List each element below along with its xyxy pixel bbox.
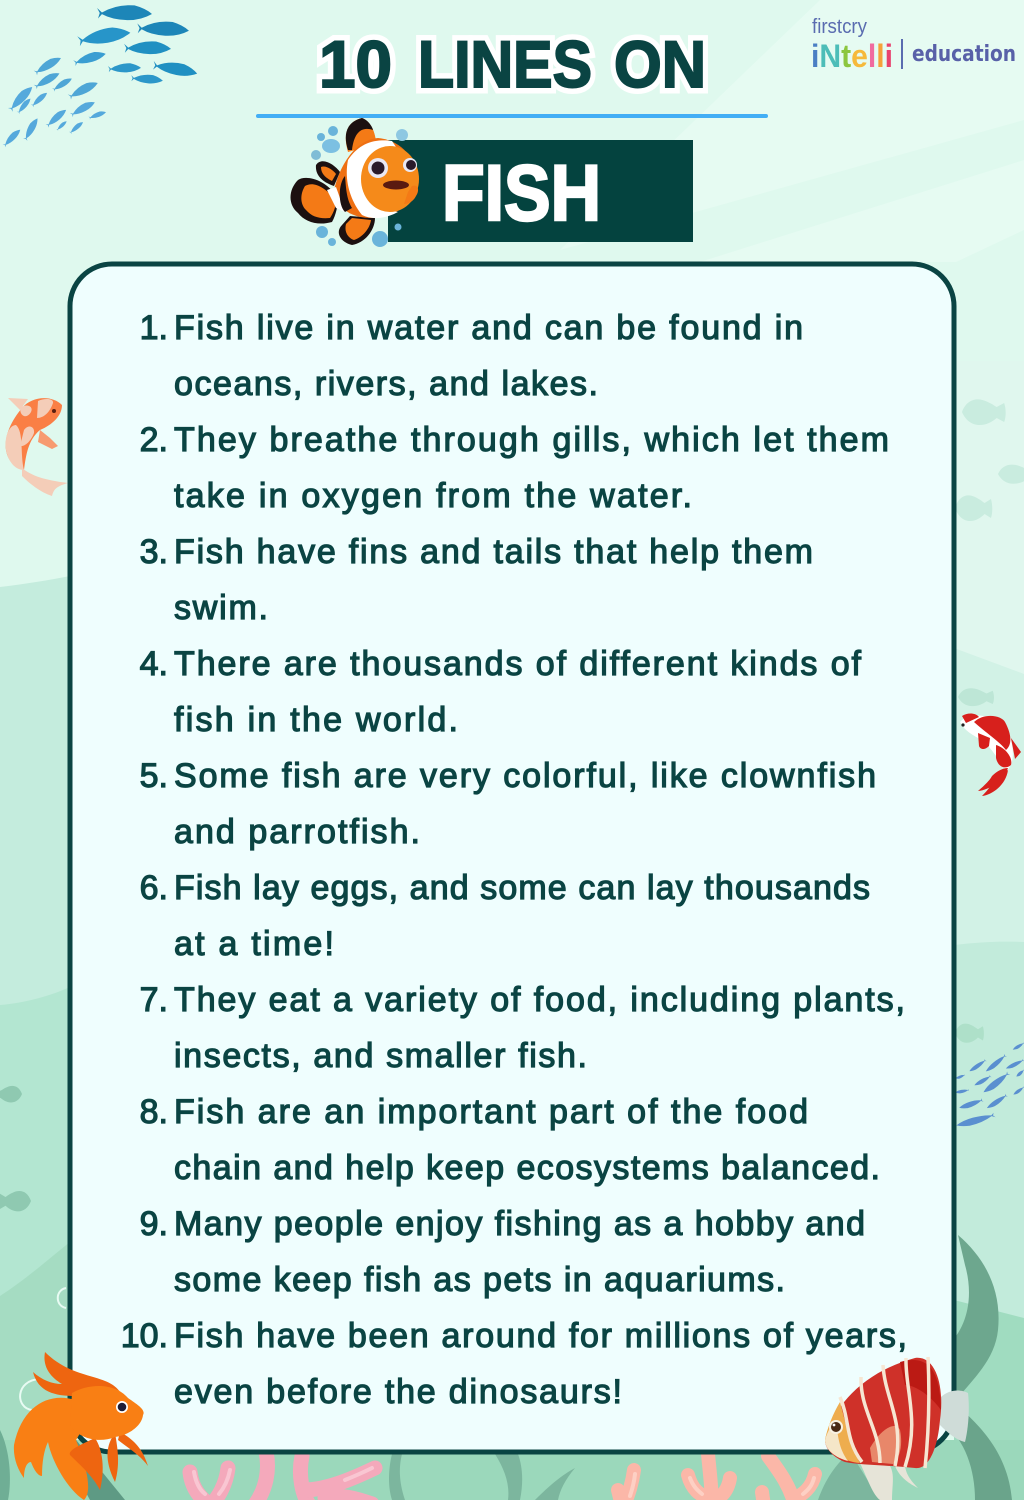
title: ON [614, 27, 706, 101]
item 4: 4. [140, 645, 168, 683]
item 7: insects, and smaller fish. [174, 1037, 587, 1075]
item 9: some keep fish as pets in aquariums. [174, 1261, 785, 1299]
koi fish left [6, 398, 68, 496]
striped red fish [825, 1357, 969, 1500]
item 6: at a time! [174, 925, 334, 963]
item 9: 9. [140, 1205, 168, 1243]
item 5: Some fish are very colorful, like clownfish [174, 757, 876, 795]
item 3: swim. [174, 589, 268, 627]
item 8: Fish are an important part of the food [174, 1093, 808, 1131]
item 1 [140, 309, 803, 403]
item 6 [140, 869, 870, 963]
school of fish right [955, 1042, 1024, 1129]
title: LINES [418, 27, 592, 101]
item 7: They eat a variety of food, including plants, [174, 981, 905, 1019]
item 4: There are thousands of different kinds of [174, 645, 862, 683]
heading banner [388, 140, 693, 242]
item 6: 6. [140, 869, 168, 907]
item 2: They breathe through gills, which let them [174, 421, 889, 459]
item 4: fish in the world. [174, 701, 458, 739]
goldfish [14, 1352, 148, 1500]
item 5: and parrotfish. [174, 813, 420, 851]
coral [190, 1452, 815, 1500]
pale fish silhouettes [0, 399, 1024, 1211]
item 4 [140, 645, 862, 739]
item 8: 8. [140, 1093, 168, 1131]
title: 10 [319, 27, 392, 101]
item 3: 3. [140, 533, 168, 571]
item 7 [140, 981, 905, 1075]
item 10 [121, 1317, 907, 1411]
seaweed [0, 1235, 1012, 1500]
item 1: oceans, rivers, and lakes. [174, 365, 598, 403]
item 3: Fish have fins and tails that help them [174, 533, 813, 571]
item 1: 1. [140, 309, 168, 347]
heading banner: FISH [442, 148, 601, 237]
item 2: 2. [140, 421, 168, 459]
item 9: Many people enjoy fishing as a hobby and [174, 1205, 865, 1243]
item 2 [140, 421, 889, 515]
panel box [70, 264, 954, 1452]
clownfish [290, 118, 419, 247]
panel [70, 264, 954, 1452]
logo [811, 16, 1016, 74]
title divider [256, 114, 768, 118]
item 9 [140, 1205, 865, 1299]
item 8 [140, 1093, 880, 1187]
logo: iNtelli [811, 38, 893, 74]
item 10: Fish have been around for millions of years, [174, 1317, 907, 1355]
title: LINES [418, 27, 592, 101]
item 8: chain and help keep ecosystems balanced. [174, 1149, 880, 1187]
school of fish top left [2, 5, 198, 148]
logo: firstcry [812, 16, 867, 38]
title: ON [614, 27, 706, 101]
koi fish right [960, 713, 1021, 796]
item 3 [140, 533, 813, 627]
title [319, 27, 706, 101]
item 10: even before the dinosaurs! [174, 1373, 622, 1411]
item 1: Fish live in water and can be found in [174, 309, 803, 347]
item 2: take in oxygen from the water. [174, 477, 692, 515]
item 6: Fish lay eggs, and some can lay thousands [174, 869, 870, 907]
item 5: 5. [140, 757, 168, 795]
bubbles [20, 1288, 66, 1410]
item 7: 7. [140, 981, 168, 1019]
item 5 [140, 757, 876, 851]
title: 10 [319, 27, 392, 101]
item 10: 10. [121, 1317, 168, 1355]
